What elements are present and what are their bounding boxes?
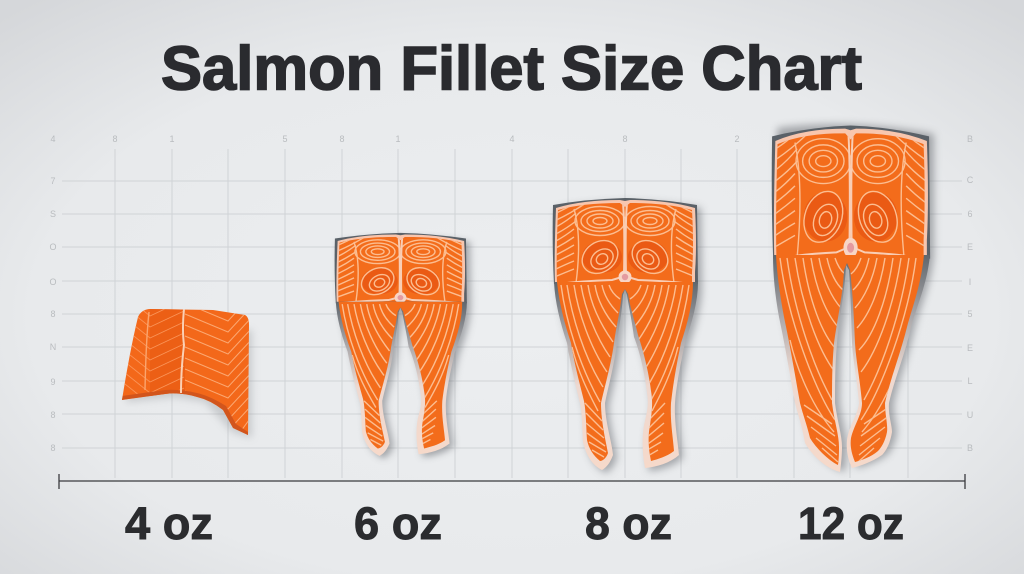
grid lines xyxy=(62,149,962,478)
tiny grid tick labels: 4 xyxy=(50,134,56,144)
tiny grid tick labels: O xyxy=(49,277,57,287)
label 8 oz: 8 oz xyxy=(585,498,672,549)
tiny grid tick labels: 8 xyxy=(112,134,118,144)
tiny grid tick labels: 8 xyxy=(50,410,56,420)
tiny grid tick labels: 8 xyxy=(339,134,345,144)
tiny grid tick labels: S xyxy=(50,209,56,219)
12 oz salmon steak xyxy=(770,124,934,474)
tiny grid tick labels xyxy=(49,134,974,453)
tiny grid tick labels: O xyxy=(49,242,57,252)
8 oz steak upper loin xyxy=(552,197,698,287)
title: Salmon Fillet Size Chart xyxy=(161,34,862,104)
size labels xyxy=(125,498,904,549)
label 4 oz: 4 oz xyxy=(125,498,213,549)
tiny grid tick labels: 7 xyxy=(50,176,56,186)
tiny grid tick labels: 8 xyxy=(622,134,628,144)
8 oz steak lower belly flaps xyxy=(552,281,698,471)
tiny grid tick labels: 2 xyxy=(734,134,740,144)
tiny grid tick labels: N xyxy=(50,342,56,352)
tiny grid tick labels: 5 xyxy=(282,134,288,144)
horizontal axis xyxy=(59,474,965,489)
tiny grid tick labels: U xyxy=(967,410,973,420)
tiny grid tick labels: 8 xyxy=(50,309,56,319)
6 oz salmon steak xyxy=(334,232,471,459)
label 12 oz: 12 oz xyxy=(798,498,904,549)
tiny grid tick labels: 9 xyxy=(50,377,56,387)
tiny grid tick labels: 5 xyxy=(967,309,973,319)
tiny grid tick labels: B xyxy=(967,134,973,144)
tiny grid tick labels: 4 xyxy=(509,134,515,144)
tiny grid tick labels: E xyxy=(967,242,973,252)
tiny grid tick labels: B xyxy=(967,443,973,453)
4 oz salmon fillet xyxy=(122,309,254,439)
tiny grid tick labels: E xyxy=(967,343,973,353)
tiny grid tick labels: C xyxy=(967,175,974,185)
12 oz steak lower belly flaps xyxy=(770,254,930,474)
tiny grid tick labels: 6 xyxy=(967,209,973,219)
tiny grid tick labels: 8 xyxy=(50,443,56,453)
12 oz steak upper loin xyxy=(771,124,930,263)
tiny grid tick labels: 1 xyxy=(169,134,175,144)
tiny grid tick labels: I xyxy=(969,277,971,287)
8 oz salmon steak xyxy=(552,197,702,473)
6 oz steak upper loin xyxy=(334,232,467,306)
tiny grid tick labels: L xyxy=(967,376,973,386)
label 6 oz: 6 oz xyxy=(354,498,442,549)
6 oz steak lower belly flaps xyxy=(334,301,467,457)
tiny grid tick labels: 1 xyxy=(395,134,401,144)
